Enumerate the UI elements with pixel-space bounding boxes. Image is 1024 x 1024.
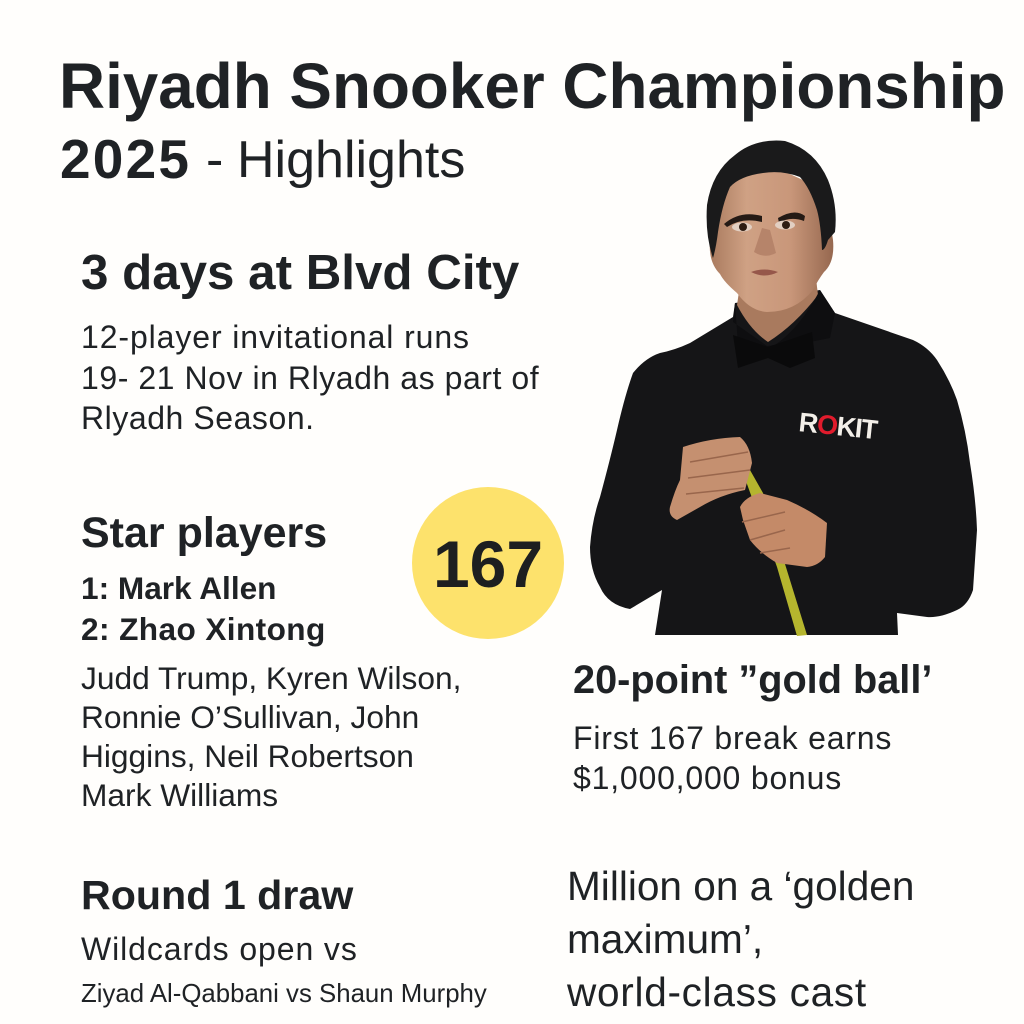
text: other players: Mark Williams bbox=[81, 777, 278, 813]
heading: gold ball: 20-point ”gold ball’ bbox=[573, 658, 932, 702]
face bbox=[710, 165, 833, 312]
text: bonus: $1,000,000 bonus bbox=[573, 760, 842, 796]
hair bbox=[707, 141, 836, 258]
title: Riyadh Snooker Championship bbox=[59, 50, 1005, 122]
subtitle word: Highlights bbox=[237, 131, 465, 189]
right hand finger lines bbox=[742, 512, 790, 553]
badge: 167: 167 bbox=[433, 527, 543, 601]
heading: 3 days: 3 days at Blvd City bbox=[81, 245, 519, 300]
panel: star players bbox=[81, 509, 461, 813]
eyebrows bbox=[724, 212, 805, 227]
left hand finger lines bbox=[686, 452, 750, 494]
text: bonus bbox=[573, 720, 892, 796]
text: golden maximum: world-class cast bbox=[567, 969, 867, 1015]
subtitle bbox=[60, 128, 465, 190]
text: golden maximum bbox=[567, 863, 914, 1015]
logo: ROKIT bbox=[797, 407, 880, 445]
shirt bbox=[590, 290, 977, 635]
neck bbox=[737, 270, 818, 342]
text: other players: Ronnie O’Sullivan, John bbox=[81, 699, 419, 735]
nose bbox=[754, 228, 776, 256]
text: event description: Rlyadh Season. bbox=[81, 400, 315, 436]
text: opening match: Ziyad Al-Qabbani vs Shaun Murphy bbox=[81, 980, 487, 1008]
text: wildcards: Wildcards open vs bbox=[81, 931, 358, 967]
badge: 167 bbox=[412, 487, 564, 639]
heading: round 1 draw: Round 1 draw bbox=[81, 872, 353, 918]
cue bbox=[743, 470, 807, 636]
eyes bbox=[732, 222, 752, 232]
panel: gold ball bbox=[573, 658, 932, 796]
subtitle dash: - bbox=[206, 131, 223, 189]
subtitle year: 2025 bbox=[60, 128, 191, 190]
text: other players: Judd Trump, Kyren Wilson, bbox=[81, 660, 461, 696]
text: event description: 19- 21 Nov in Rlyadh as part of bbox=[81, 360, 539, 396]
text: golden maximum: maximum’, bbox=[567, 916, 763, 962]
text: seeded players: 2: Zhao Xintong bbox=[81, 611, 326, 647]
bow tie bbox=[733, 332, 815, 368]
mouth bbox=[751, 270, 778, 276]
text: other players: Higgins, Neil Robertson bbox=[81, 738, 414, 774]
text: seeded players: 1: Mark Allen bbox=[81, 570, 276, 606]
panel: round 1 draw bbox=[81, 872, 487, 1008]
panel: 3 days at Blvd City bbox=[81, 245, 539, 436]
text: other players bbox=[81, 660, 461, 813]
left hand bbox=[670, 437, 752, 520]
heading: star players: Star players bbox=[81, 509, 327, 557]
text: event description: 12-player invitational runs bbox=[81, 319, 470, 355]
text: event description bbox=[81, 319, 539, 436]
collar bbox=[733, 290, 835, 350]
text: seeded players bbox=[81, 570, 326, 647]
right hand bbox=[740, 493, 827, 567]
text: bonus: First 167 break earns bbox=[573, 720, 892, 756]
text: golden maximum: Million on a ‘golden bbox=[567, 863, 914, 909]
